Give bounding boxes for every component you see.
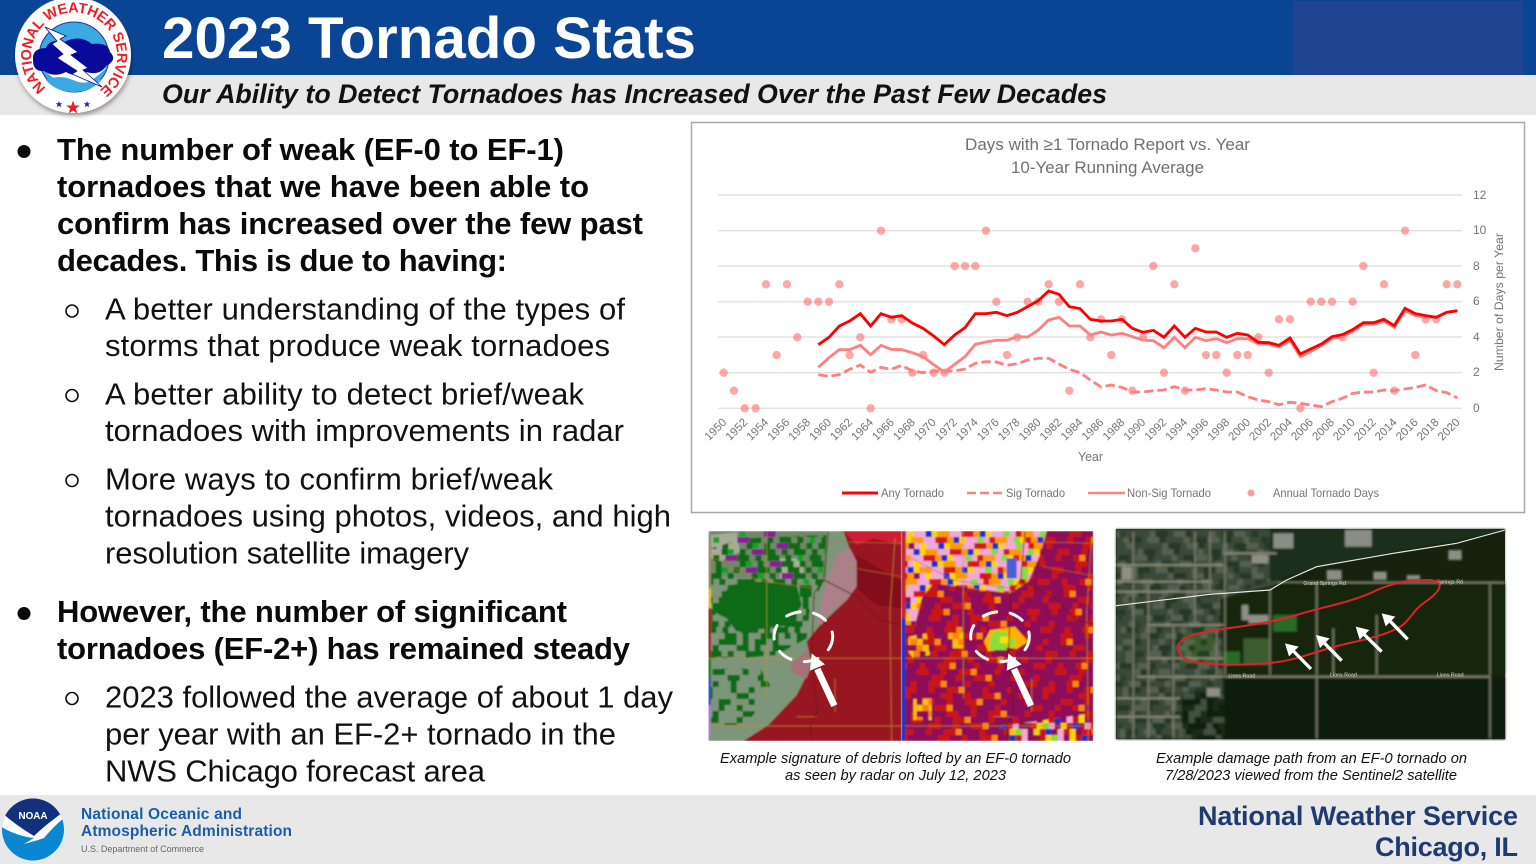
sub-bullet: 2023 average: 2023 followed the average of about 1 day	[105, 680, 674, 714]
line: any tornado	[818, 291, 1457, 354]
sub-bullet: radar: A better ability to detect brief/weak	[105, 376, 584, 412]
x axis year labels: 2002	[1247, 417, 1274, 443]
y axis labels: 0	[1473, 401, 1480, 415]
subtitle: Our Ability to Detect Tornadoes has Increased Over the Past Few Decades	[162, 79, 1107, 109]
sub-bullet: radar: tornadoes with improvements in radar	[105, 413, 624, 448]
x axis year labels: 1988	[1101, 417, 1127, 443]
map road labels: Grand Springs Rd	[1303, 581, 1346, 587]
damage path outline	[1178, 580, 1440, 664]
text: NOAA name: U.S. Department of Commerce	[81, 844, 204, 854]
x axis year labels: 1992	[1143, 417, 1169, 443]
x axis year labels: 1958	[787, 417, 813, 443]
sub-bullet: photos: More ways to confirm brief/weak	[105, 462, 554, 496]
icon: NOAA logo: NOAA	[18, 811, 48, 822]
chart title	[965, 135, 1250, 177]
y axis labels: 10	[1473, 223, 1487, 237]
x axis year labels	[703, 416, 1463, 443]
bullet group: weak tornadoes: The number of weak (EF-0 to EF-1)	[57, 132, 564, 167]
bullet group: weak tornadoes: decades. This is due to having:	[57, 243, 507, 278]
legend: Non-Sig Tornado	[1127, 486, 1211, 500]
line: non-sig tornado	[818, 311, 1457, 372]
sub-bullet: understanding	[66, 292, 625, 363]
x axis year labels: 1998	[1206, 417, 1232, 443]
header bar	[0, 0, 1536, 75]
map road labels: Lions Road	[1437, 673, 1464, 679]
legend: Any Tornado	[881, 486, 944, 500]
caption: radar image	[720, 751, 1071, 784]
sub-bullet: understanding: A better understanding of the types of	[105, 292, 625, 326]
arrow: left radar pointer	[810, 653, 834, 706]
damage path arrows	[1285, 613, 1408, 669]
y axis labels: 4	[1473, 330, 1480, 344]
caption: satellite image: Example damage path from an EF-0 tornado on	[1156, 751, 1467, 767]
x axis year labels: 1950	[703, 417, 729, 443]
x axis year labels: 2020	[1436, 417, 1463, 443]
x axis year labels: 1982	[1038, 417, 1065, 443]
x axis year labels: 1976	[975, 417, 1002, 443]
bullet group: significant tornadoes	[18, 594, 631, 666]
sub-bullet: photos: resolution satellite imagery	[105, 536, 470, 570]
x axis year labels: 1968	[891, 417, 918, 443]
x axis year labels: 2012	[1352, 417, 1379, 443]
legend	[842, 486, 1379, 500]
x axis year labels: 1978	[996, 417, 1023, 443]
x axis year labels: 1974	[954, 416, 981, 443]
bullet group: weak tornadoes	[18, 132, 643, 278]
x axis year labels: 2004	[1268, 416, 1295, 443]
caption: satellite image	[1156, 751, 1467, 784]
legend: Sig Tornado	[1006, 486, 1065, 500]
caption: satellite image: 7/28/2023 viewed from the Sentinel2 satellite	[1165, 768, 1457, 784]
x axis year labels: 1990	[1122, 417, 1148, 443]
x axis year labels: 1996	[1185, 417, 1211, 443]
chart title: Days with ≥1 Tornado Report vs. Year	[965, 135, 1250, 154]
y axis labels: 12	[1473, 188, 1487, 202]
bullet group: weak tornadoes: tornadoes that we have been able to	[57, 169, 589, 204]
text: National Weather Service Chicago: National Weather Service	[1198, 801, 1518, 831]
y axis labels	[1473, 188, 1487, 415]
sub-bullet: photos: tornadoes using photos, videos, and high	[105, 498, 671, 534]
map road labels: Lions Road	[1228, 674, 1255, 680]
sub-bullet: 2023 average: NWS Chicago forecast area	[105, 754, 486, 788]
footer band	[0, 795, 1536, 864]
x axis year labels: 2010	[1331, 417, 1358, 443]
x axis year labels: 2000	[1227, 417, 1253, 443]
subtitle band	[0, 75, 1536, 115]
text: National Weather Service Chicago	[1198, 801, 1518, 862]
sub-bullet: understanding: storms that produce weak tornadoes	[105, 328, 610, 363]
callout: dashed circle left	[774, 612, 833, 662]
panel: satellite damage path image	[1114, 527, 1507, 741]
x axis year labels: 1970	[912, 417, 939, 443]
x axis year labels: 1986	[1080, 417, 1106, 443]
arrow: right radar pointer	[1007, 653, 1031, 706]
legend: Annual Tornado Days	[1273, 486, 1379, 500]
x axis year labels: 1994	[1164, 416, 1191, 443]
bullet group: significant tornadoes: However, the number of significant	[57, 594, 567, 629]
callout: dashed circle right	[971, 612, 1029, 662]
y axis labels: 6	[1473, 294, 1480, 308]
text: NOAA name	[81, 806, 292, 854]
bullet group: significant tornadoes: tornadoes (EF-2+) has remained steady	[57, 631, 631, 666]
bullet group: weak tornadoes: confirm has increased over the few past	[57, 206, 643, 241]
x axis year labels: 1984	[1059, 416, 1086, 443]
x axis year labels: 1972	[933, 417, 960, 443]
map road labels	[1228, 579, 1464, 680]
icon: National Weather Service logo: NATIONAL WEATHER SERVICE	[20, 2, 128, 98]
sub-bullet: photos	[66, 462, 671, 570]
x axis year labels: 1964	[849, 416, 876, 443]
y axis title: Number of Days per Year	[1492, 233, 1506, 371]
y axis labels: 2	[1473, 365, 1480, 379]
line: sig tornado	[818, 358, 1457, 407]
text: NOAA name: Atmospheric Administration	[81, 823, 292, 840]
x axis year labels: 1952	[724, 417, 750, 443]
sub-bullet: 2023 average	[66, 680, 674, 788]
title: 2023 Tornado Stats	[162, 6, 696, 71]
x axis year labels: 2014	[1373, 416, 1400, 443]
radar: left reflectivity panel	[708, 531, 902, 741]
caption: radar image: as seen by radar on July 12, 2023	[785, 768, 1006, 784]
map road labels: Lions Road	[1330, 673, 1357, 679]
annual tornado day dots	[719, 226, 1461, 412]
x axis year labels: 2008	[1310, 417, 1337, 443]
icon: NOAA logo	[2, 798, 64, 860]
x axis year labels: 2018	[1415, 417, 1442, 443]
text block: left column bullets	[18, 132, 674, 788]
x axis year labels: 1954	[745, 416, 772, 443]
panel: line chart	[692, 122, 1524, 512]
x axis year labels: 2006	[1289, 417, 1316, 443]
x axis title: Year	[1078, 449, 1104, 464]
caption: radar image: Example signature of debris lofted by an EF-0 tornado	[720, 751, 1071, 767]
text: National Weather Service Chicago: Chicago, IL	[1375, 832, 1518, 862]
x axis year labels: 1960	[808, 417, 834, 443]
chart title: 10-Year Running Average	[1011, 158, 1204, 177]
sub-bullet: 2023 average: per year with an EF-2+ tornado in the	[105, 716, 616, 752]
x axis year labels: 2016	[1394, 417, 1421, 443]
panel: radar debris signature image	[708, 531, 1094, 741]
y axis labels: 8	[1473, 259, 1480, 273]
highway	[1116, 530, 1505, 606]
x axis year labels: 1980	[1017, 417, 1044, 443]
x axis year labels: 1966	[870, 417, 897, 443]
text: NOAA name: National Oceanic and	[81, 806, 242, 823]
radar: right correlation panel	[902, 531, 1094, 741]
sub-bullet: radar	[66, 376, 624, 448]
x axis year labels: 1956	[766, 417, 792, 443]
x axis year labels: 1962	[828, 417, 855, 443]
map road labels: Springs Rd	[1437, 579, 1463, 585]
